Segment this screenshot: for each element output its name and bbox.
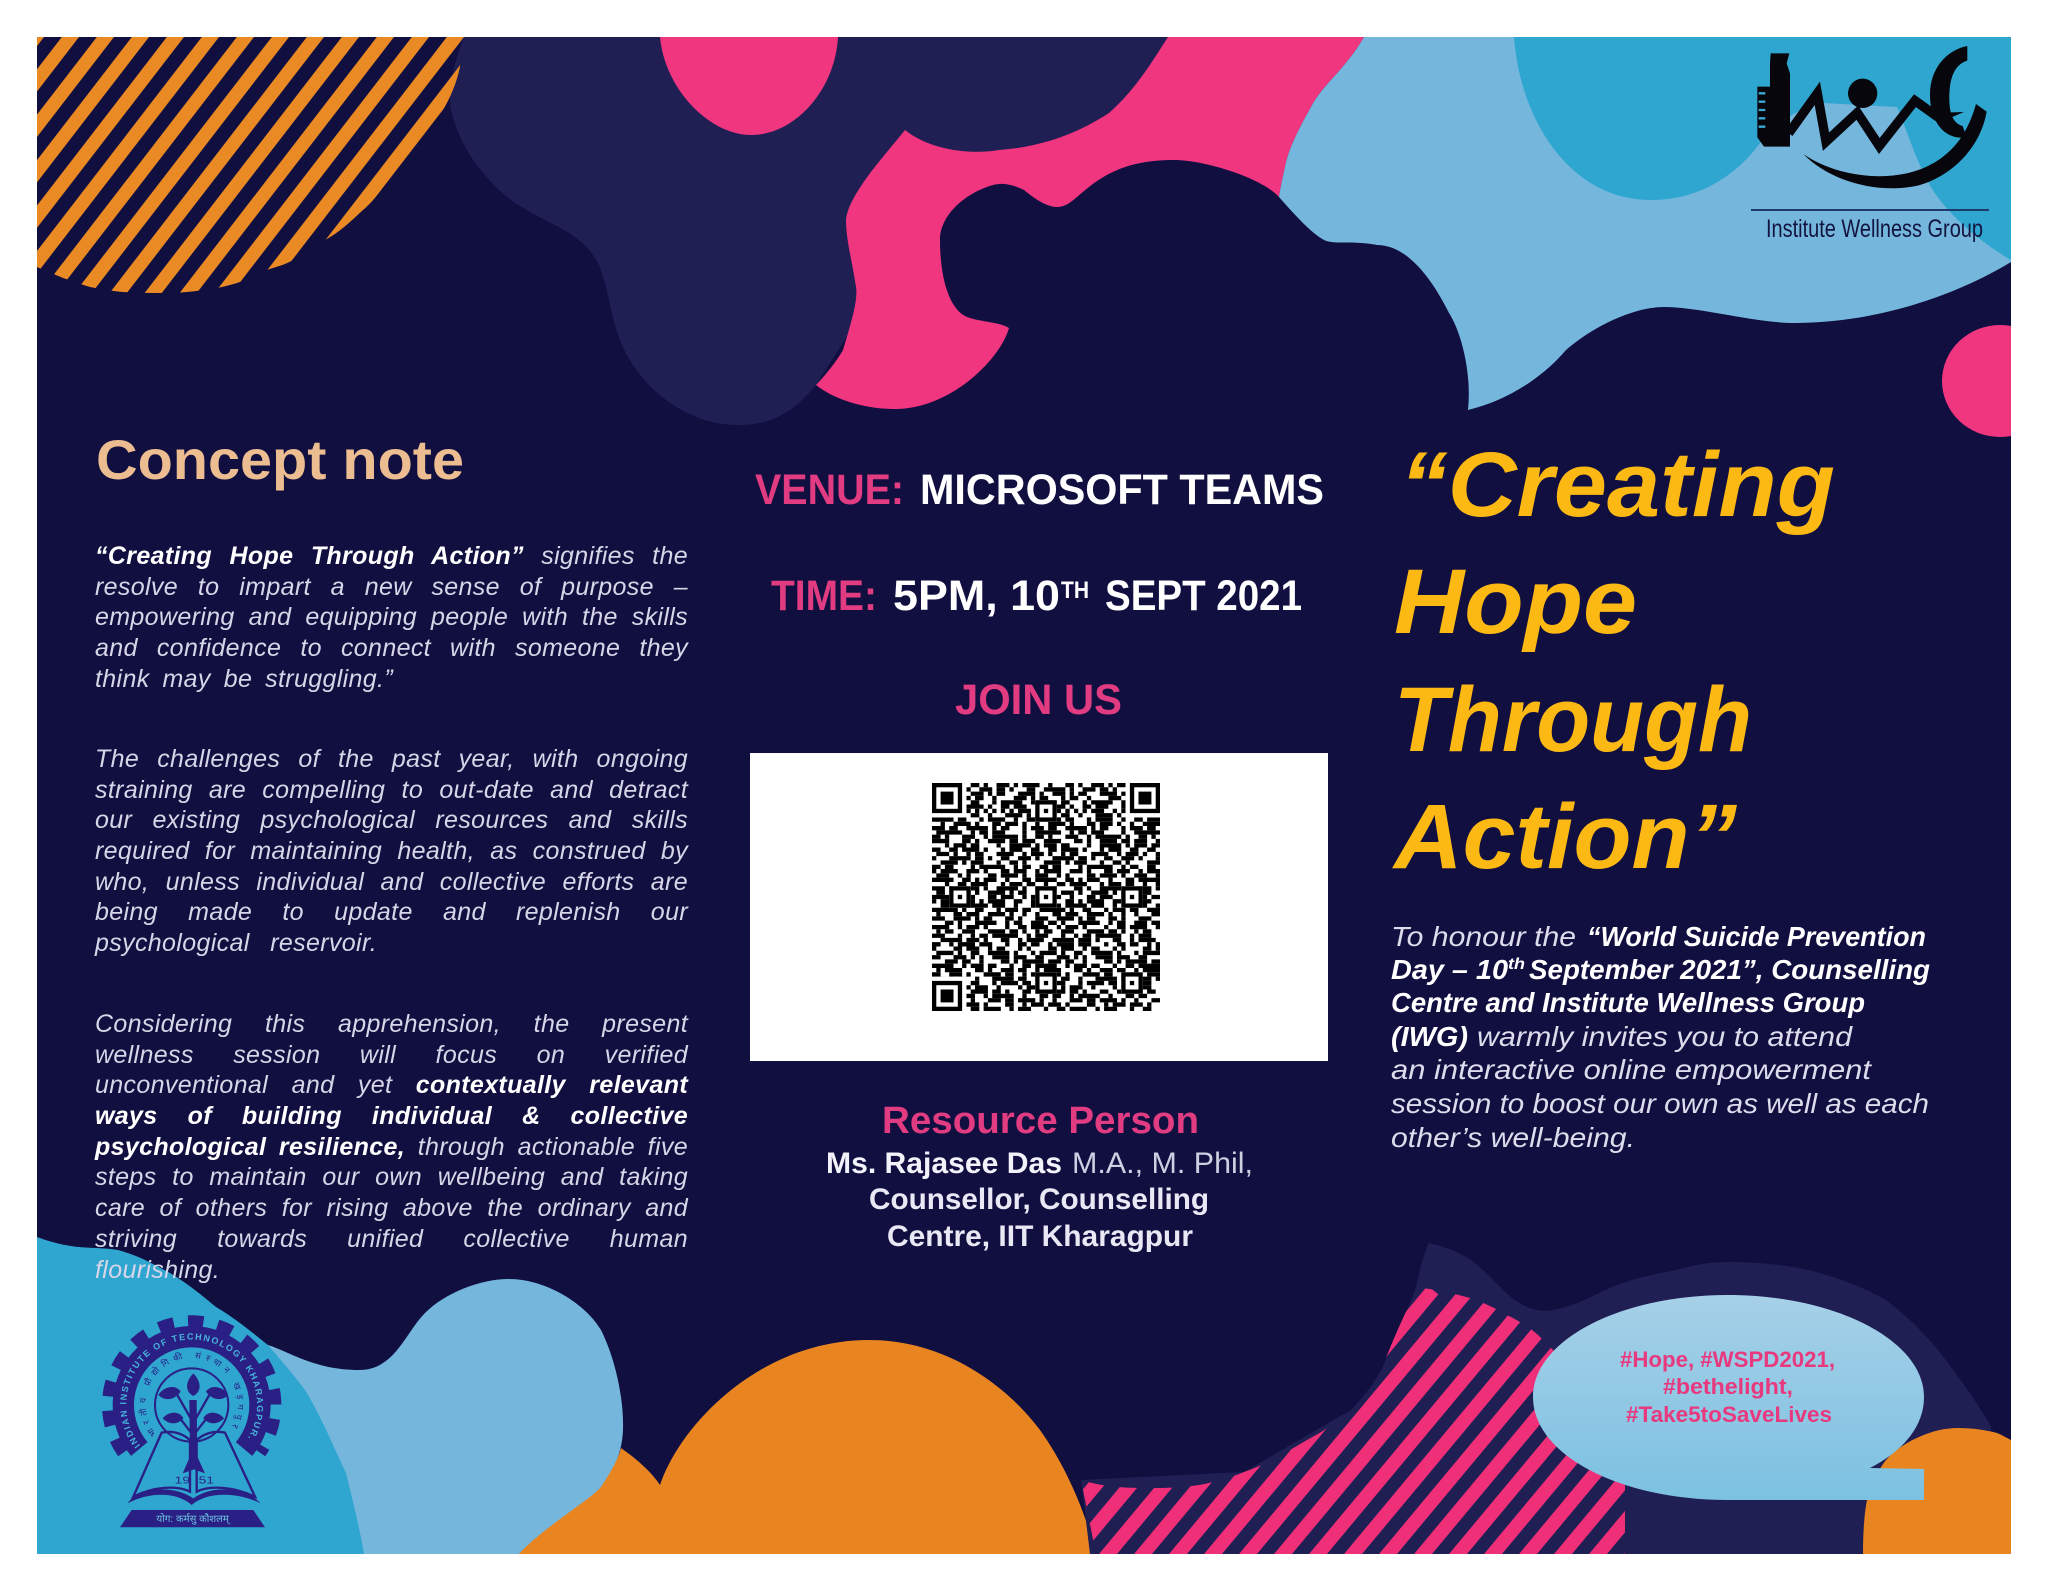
invitation text: Day – 10 <box>1391 954 1509 985</box>
time line: 5PM, 10 <box>893 572 1060 620</box>
invitation text: To honour the <box>1391 921 1576 952</box>
time line: TIME: <box>771 572 877 620</box>
concept note paragraph 3: care of others for rising above the ordinary and <box>95 1194 688 1222</box>
hashtags: #bethelight, <box>1663 1374 1793 1399</box>
concept note paragraph 3 <box>94 1010 689 1284</box>
concept note paragraph 1: and confidence to connect with someone they <box>95 634 688 662</box>
concept note paragraph 3: striving towards unified collective human <box>95 1225 688 1253</box>
concept note paragraph 3: unconventional and yet contextually relevant <box>95 1071 688 1099</box>
shape: pink circle right <box>1942 325 2011 437</box>
concept note paragraph 2: The challenges of the past year, with ongoing <box>95 745 688 773</box>
concept note paragraph 2: who, unless individual and collective efforts are <box>95 868 688 896</box>
shape: light blue speech blob <box>1279 37 2011 410</box>
resource person name: Ms. Rajasee Das <box>826 1147 1062 1180</box>
invitation text: “World Suicide Prevention <box>1587 921 1926 952</box>
concept note paragraph 3: wellness session will focus on verified <box>95 1041 688 1069</box>
heading: Concept note: Concept note <box>96 428 464 491</box>
concept note paragraph 2: psychological reservoir. <box>95 929 377 957</box>
logo: IIT Kharagpur emblem <box>102 1315 282 1528</box>
concept note paragraph 2: required for maintaining health, as construed by <box>95 837 688 865</box>
invitation text: September 2021”, Counselling <box>1529 954 1930 985</box>
resource person heading: Resource Person <box>882 1100 1199 1142</box>
shape: pink striped area <box>1083 1288 1625 1554</box>
logo mark <box>1757 46 1987 188</box>
hashtags: #Take5toSaveLives <box>1626 1402 1832 1427</box>
main title <box>1392 434 1835 888</box>
main title: “Creating <box>1400 434 1835 536</box>
emblem ring text: INDIAN INSTITUTE OF TECHNOLOGY KHARAGPUR. <box>120 1333 264 1449</box>
venue line <box>755 466 1324 514</box>
venue line: MICROSOFT TEAMS <box>920 466 1324 514</box>
concept note paragraph 2: straining are compelling to out-date and detract <box>95 776 688 804</box>
resource person centre: Centre, IIT Kharagpur <box>887 1220 1193 1253</box>
time line: TH <box>1061 577 1089 604</box>
main title: Action” <box>1392 786 1737 888</box>
invitation text: (IWG) <box>1391 1021 1468 1052</box>
concept note paragraph 1: “Creating Hope Through Action” signifies the <box>95 542 688 570</box>
shape: pink oval top <box>660 37 838 135</box>
invitation text: session to boost our own as well as each <box>1391 1088 1929 1119</box>
shape: striped orange circle <box>37 37 464 293</box>
resource person role: Counsellor, Counselling <box>869 1183 1209 1216</box>
concept note paragraph 2: our existing psychological resources and skills <box>95 806 688 834</box>
logo: Institute Wellness Group <box>1751 46 1989 243</box>
shape: teal blob bottom left <box>37 1237 364 1554</box>
concept note paragraph 2 <box>94 745 689 957</box>
hashtags <box>1620 1347 1835 1427</box>
shape: teal blob <box>1514 37 2011 260</box>
main title: Through <box>1394 669 1752 771</box>
concept note paragraph 3: flourishing. <box>95 1256 220 1284</box>
resource person degrees: M.A., M. Phil, <box>1072 1147 1253 1180</box>
time line <box>771 572 1302 620</box>
invitation text: an interactive online empowerment <box>1391 1054 1873 1085</box>
hashtags: #Hope, #WSPD2021, <box>1620 1347 1835 1372</box>
venue line: VENUE: <box>755 466 904 514</box>
shape: light blue blob bottom left <box>268 1279 623 1554</box>
QR code <box>932 783 1160 1011</box>
shape: orange blob bottom centre <box>519 1340 1096 1554</box>
concept note paragraph 3: psychological resilience, through actionable five <box>95 1133 688 1161</box>
concept note paragraph 3: steps to maintain our own wellbeing and taking <box>95 1163 688 1191</box>
emblem year second part: 51 <box>199 1475 215 1486</box>
invitation text: Centre and Institute Wellness Group <box>1391 987 1865 1018</box>
hashtag speech bubble <box>1533 1295 1924 1500</box>
emblem Hindi ring text: भारतीय प्रौद्योगिकी संस्थान खड़गपुर <box>138 1352 244 1437</box>
logo caption: Institute Wellness Group <box>1766 215 1983 243</box>
concept note paragraph 1: think may be struggling.” <box>95 665 393 693</box>
main title: Hope <box>1394 551 1637 653</box>
QR panel <box>750 753 1328 1061</box>
concept note paragraph 1 <box>95 542 689 693</box>
invitation text: warmly invites you to attend <box>1477 1021 1854 1052</box>
invitation text <box>1391 921 1930 1153</box>
concept note paragraph 3: Considering this apprehension, the present <box>95 1010 688 1038</box>
concept note paragraph 3: ways of building individual & collective <box>95 1102 688 1130</box>
shape: top dark blob <box>450 37 1168 425</box>
concept note paragraph 1: resolve to impart a new sense of purpose – <box>95 573 688 601</box>
invitation text: th <box>1508 956 1525 973</box>
shape: orange blob bottom right <box>1863 1428 2011 1554</box>
time line: SEPT 2021 <box>1105 572 1302 620</box>
shape: pink blob <box>816 37 1364 409</box>
join us: JOIN US <box>955 676 1122 724</box>
concept note paragraph 1: empowering and equipping people with the skills <box>95 603 688 631</box>
invitation text: other’s well-being. <box>1391 1122 1635 1153</box>
emblem motto: योग: कर्मसु कौशलम् <box>156 1513 231 1525</box>
concept note paragraph 2: being made to update and replenish our <box>95 898 688 926</box>
shape: dark blob bottom right <box>1081 1243 1991 1554</box>
resource person block <box>826 1100 1253 1253</box>
emblem year: 19 <box>175 1475 191 1486</box>
